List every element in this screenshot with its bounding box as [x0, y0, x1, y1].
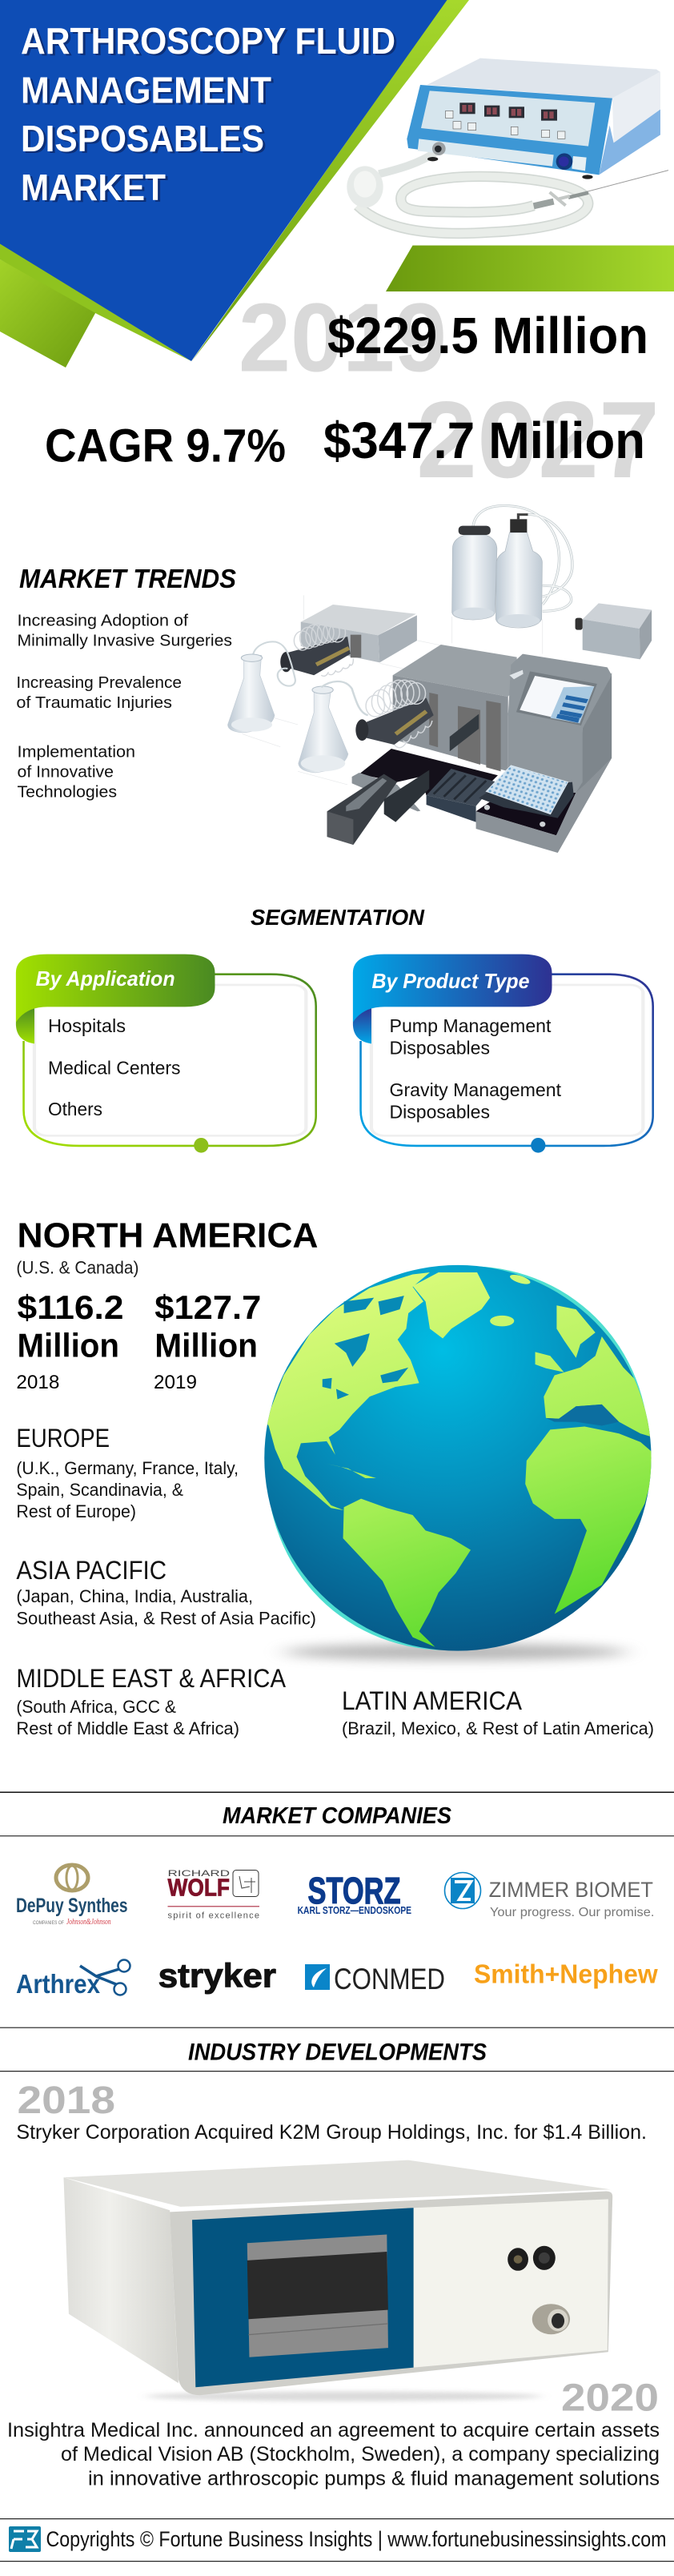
market trends list: Increasing Prevalence: [16, 674, 182, 692]
green accent bar: [386, 245, 674, 291]
logo: Richard Wolf: [168, 1869, 259, 1921]
logo: Karl Storz: STORZ: [307, 1870, 400, 1911]
market trends list: Increasing Adoption of: [18, 613, 188, 630]
market trends list: [16, 613, 232, 802]
region: latin america: [342, 1686, 654, 1738]
region: asia pacific: [16, 1556, 316, 1629]
development: 2020: in innovative arthroscopic pumps & fluid management solutions: [88, 2468, 660, 2490]
title: MARKET: [21, 167, 166, 208]
panel: by product type: Pump Management: [389, 1015, 552, 1036]
logo: DePuy Synthes: Johnson&Johnson: [66, 1918, 110, 1927]
region: north america: NORTH AMERICA: [18, 1216, 319, 1256]
region: europe: Rest of Europe): [16, 1501, 136, 1521]
region: europe: Spain, Scandinavia, &: [16, 1480, 183, 1500]
title: DISPOSABLES: [21, 118, 264, 159]
region: middle east and africa: Rest of Middle East & Africa): [16, 1718, 239, 1738]
development: 2020: [7, 2377, 660, 2490]
market trends list: Technologies: [18, 784, 117, 802]
logo: Zimmer Biomet: ZIMMER BIOMET: [489, 1878, 653, 1902]
icon: Fortune Business Insights logo: [9, 2526, 41, 2552]
development: 2020: Insightra Medical Inc. announced an agreement to acquire certain assets: [7, 2419, 660, 2441]
logo: Karl Storz: KARL STORZ—ENDOSKOPE: [298, 1905, 411, 1916]
region: north america: Million: [154, 1327, 258, 1364]
market trends list: Minimally Invasive Surgeries: [18, 633, 232, 650]
logo: Stryker: stryker: [158, 1957, 276, 1995]
panel: by application: Others: [48, 1099, 102, 1119]
logo: ConMed: [305, 1963, 445, 1995]
development: 2018: [16, 2080, 647, 2144]
region: asia pacific: Southeast Asia, & Rest of Asia Pacific): [16, 1609, 316, 1629]
stat: 2019 market value: $229.5 Million: [327, 307, 648, 364]
logo: Smith and Nephew: Smith+Nephew: [474, 1959, 658, 1989]
development: 2020: 2020: [561, 2377, 659, 2420]
region: north america: [16, 1216, 319, 1393]
market trends list: of Traumatic Injuries: [16, 694, 172, 712]
logo: Richard Wolf: WOLF: [168, 1874, 230, 1902]
logo: Richard Wolf: RICHARD: [168, 1869, 230, 1879]
development: 2018: 2018: [18, 2080, 115, 2122]
stat: 2019 market value: 2019: [239, 283, 447, 392]
title: MANAGEMENT: [21, 69, 271, 111]
panel: by product type: [353, 954, 653, 1153]
region: middle east and africa: MIDDLE EAST & AFRICA: [16, 1664, 287, 1693]
logo: ConMed: CONMED: [334, 1963, 445, 1995]
region: europe: EUROPE: [16, 1424, 110, 1453]
panel: by product type: Gravity Management: [389, 1079, 562, 1100]
stat: 2019 market value: [239, 283, 648, 392]
development: 2020: of Medical Vision AB (Stockholm, Sweden), a company specializing: [61, 2443, 660, 2465]
logo: Arthrex: Arthrex: [16, 1969, 101, 1999]
logo: Zimmer Biomet: [445, 1872, 654, 1919]
panel: by application: Medical Centers: [48, 1058, 181, 1079]
development: 2018: Stryker Corporation Acquired K2M Group Holdings, Inc. for $1.4 Billion.: [16, 2121, 647, 2144]
heading: industry developments: INDUSTRY DEVELOPMENTS: [188, 2039, 487, 2065]
panel: by application: By Application: [36, 967, 175, 991]
region: north america: 2018: [16, 1372, 59, 1393]
illustration: fluid pump device with tubing: [347, 58, 668, 233]
panel: by product type: Disposables: [389, 1038, 490, 1059]
heading: market trends: MARKET TRENDS: [19, 564, 236, 593]
stat: 2027 market value: 2027: [416, 379, 660, 500]
market trends list: of Innovative: [18, 764, 114, 782]
title: [21, 20, 395, 208]
region: latin america: LATIN AMERICA: [342, 1686, 523, 1715]
logo: DePuy Synthes: [16, 1865, 128, 1927]
panel: by product type: Disposables: [389, 1102, 490, 1123]
region: middle east and africa: [16, 1664, 287, 1738]
region: asia pacific: ASIA PACIFIC: [16, 1556, 166, 1585]
region: asia pacific: (Japan, China, India, Australia,: [16, 1586, 253, 1606]
region: north america: $127.7: [154, 1288, 261, 1326]
heading: market companies: MARKET COMPANIES: [223, 1803, 452, 1829]
panel: by application: Hospitals: [48, 1015, 126, 1036]
heading: segmentation: SEGMENTATION: [251, 905, 425, 930]
market trends list: Implementation: [18, 744, 135, 762]
region: north america: Million: [18, 1327, 119, 1364]
logo: Arthrex: [16, 1960, 130, 1999]
region: europe: (U.K., Germany, France, Italy,: [16, 1458, 239, 1478]
header banner: blue and green shapes: [0, 0, 469, 368]
illustration: arthroscopy pump unit: [63, 2160, 612, 2401]
logo: Richard Wolf: spirit of excellence: [168, 1911, 259, 1921]
region: latin america: (Brazil, Mexico, & Rest of Latin America): [342, 1718, 654, 1738]
region: north america: (U.S. & Canada): [16, 1257, 138, 1278]
illustration: globe: [264, 1265, 652, 1666]
region: middle east and africa: (South Africa, GCC &: [16, 1697, 176, 1717]
logo: Zimmer Biomet: Your progress. Our promise.: [490, 1906, 654, 1919]
region: north america: 2019: [154, 1372, 197, 1393]
logo: DePuy Synthes: COMPANIES OF: [33, 1921, 64, 1926]
panel: by product type: By Product Type: [371, 969, 530, 993]
stat: 2027 market value: $347.7 Million: [323, 412, 645, 469]
illustration: automated fluid handling instrument: [228, 505, 652, 853]
logo: DePuy Synthes: DePuy Synthes: [16, 1895, 128, 1917]
stat: CAGR: CAGR 9.7%: [45, 420, 286, 472]
region: europe: [16, 1424, 239, 1521]
panel: by application: [16, 954, 316, 1153]
title: ARTHROSCOPY FLUID: [21, 20, 395, 62]
region: north america: $116.2: [18, 1288, 123, 1326]
